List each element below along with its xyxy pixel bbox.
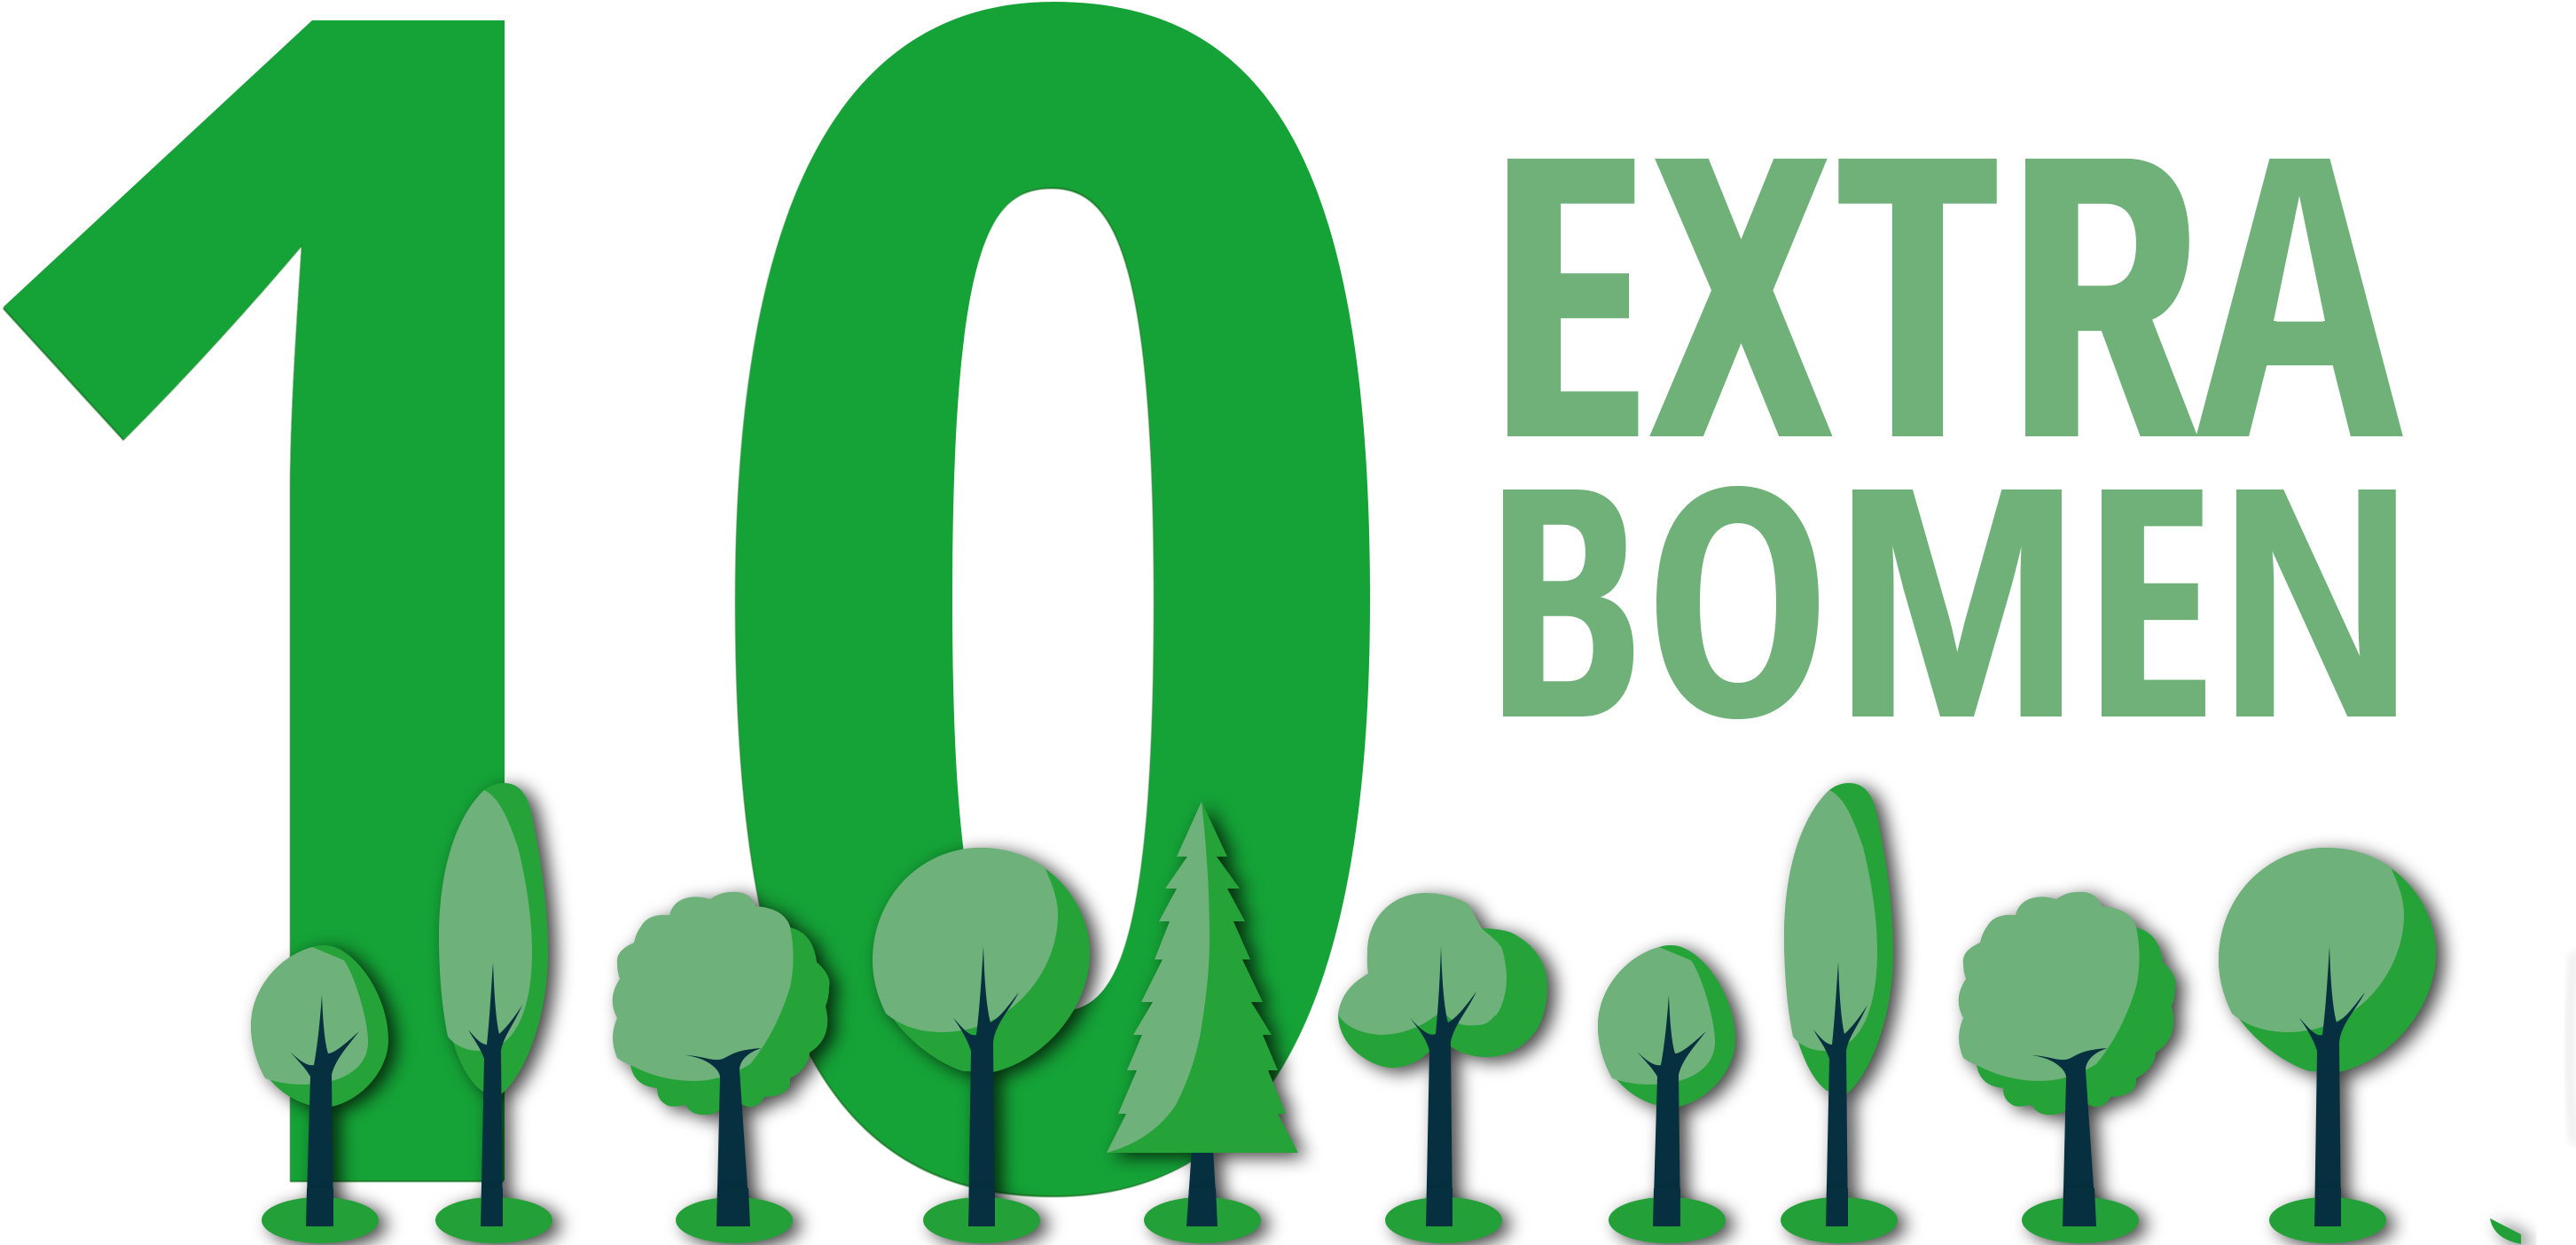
heading: EXTRA: T: [1844, 73, 1992, 522]
heading: BOMEN: N: [2220, 418, 2412, 787]
heading: EXTRA: [1507, 158, 2403, 436]
heading: EXTRA: R: [2018, 71, 2194, 522]
tree 6: two-lobed crown: [1338, 893, 1547, 1243]
tree 7: small oval: [1598, 945, 1735, 1243]
tree 5: fir: [1107, 802, 1298, 1243]
tree 10: large oval: [2219, 848, 2436, 1243]
heading: BOMEN: E: [2102, 419, 2200, 787]
heading: BOMEN: O: [1654, 418, 1821, 787]
cropped ground fragment: [2490, 1218, 2521, 1244]
tree 8: tall poplar: [1781, 783, 1898, 1243]
tree 3: bushy crown: [613, 892, 829, 1243]
tree 9: bushy crown: [1959, 892, 2175, 1243]
heading: BOMEN: [1503, 486, 2396, 719]
heading: BOMEN: B: [1496, 418, 1636, 787]
heading: BOMEN: M: [1835, 418, 2079, 787]
tree 4: large oval: [873, 848, 1090, 1243]
tree 2: tall poplar: [435, 783, 552, 1243]
heading: EXTRA: A: [2194, 72, 2406, 522]
heading: EXTRA: E: [1508, 72, 1633, 523]
tree 1: small oval: [251, 945, 388, 1243]
heading: EXTRA: X: [1655, 73, 1828, 523]
